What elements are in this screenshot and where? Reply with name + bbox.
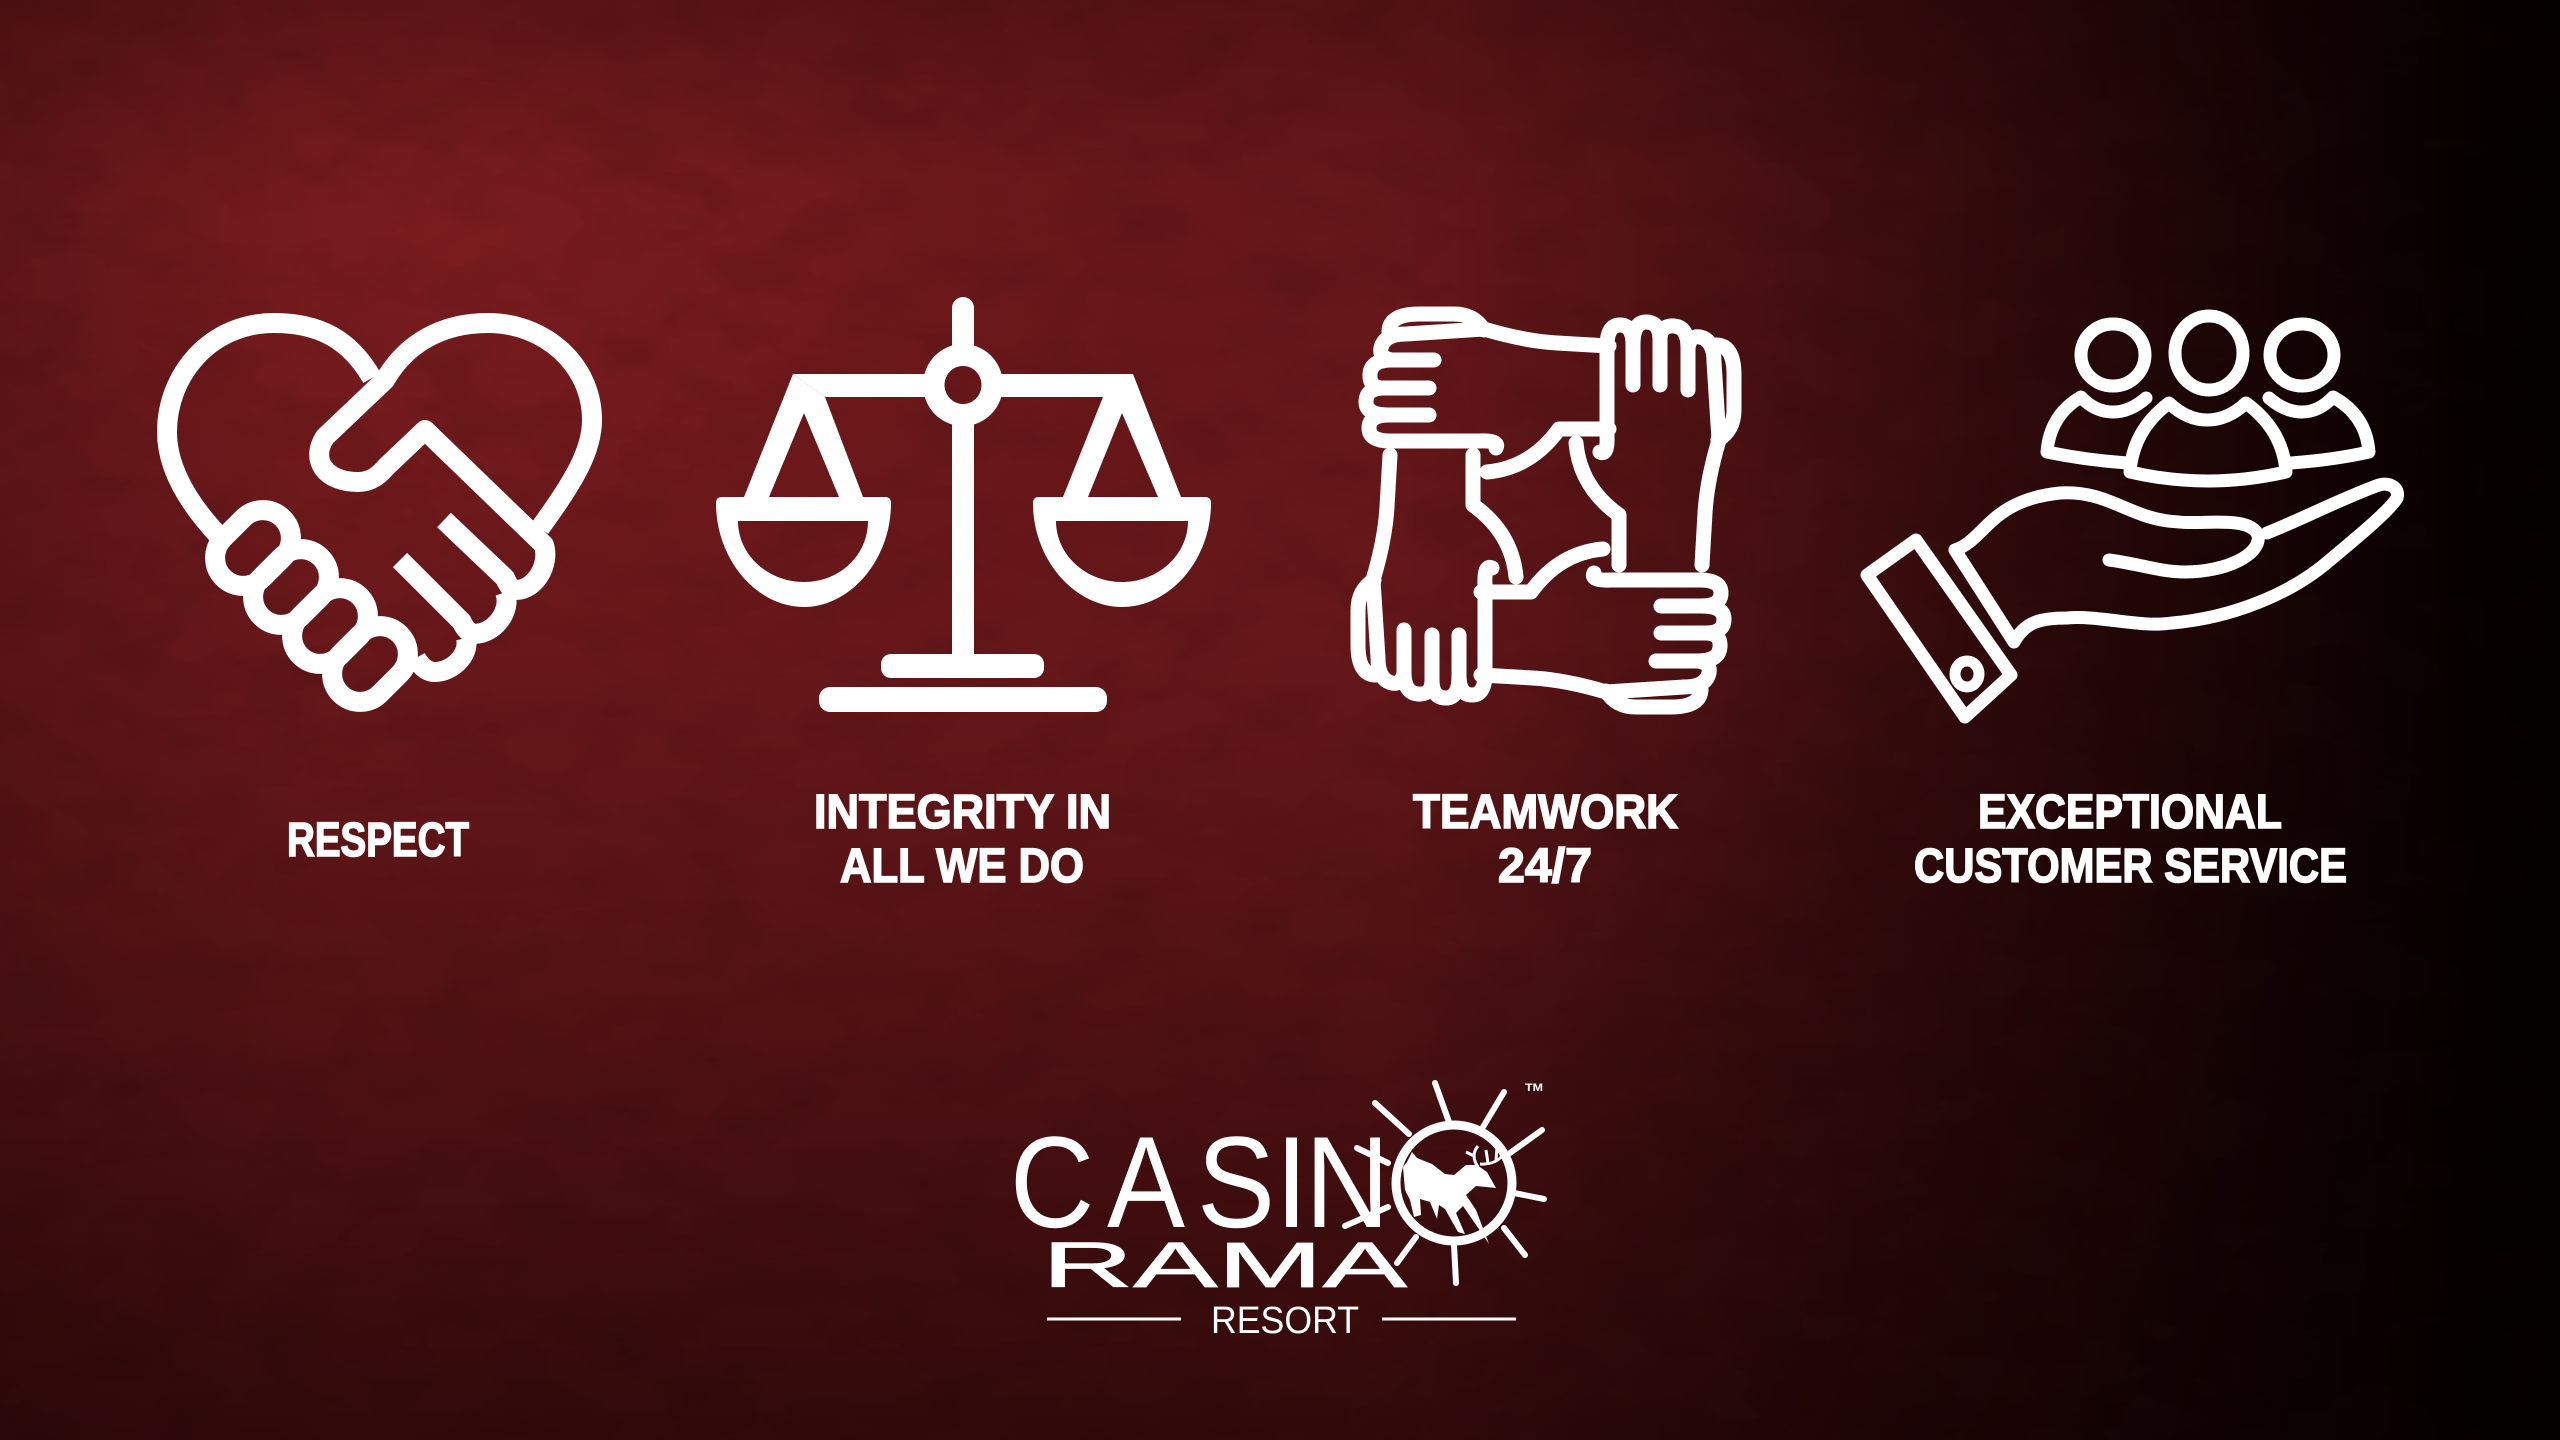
icon: handshake heart bbox=[167, 323, 592, 713]
label: exceptional customer service: CUSTOMER SERVICE bbox=[1914, 840, 2347, 893]
logo wordmark RESORT: RESORT bbox=[1211, 1300, 1359, 1342]
heart left lobe bbox=[167, 323, 372, 535]
label: teamwork 24/7: 24/7 bbox=[1498, 840, 1592, 893]
trademark: TM bbox=[1525, 1082, 1543, 1094]
logo rules bbox=[1047, 1318, 1516, 1320]
right triangle bbox=[1063, 374, 1181, 497]
emblem: leaping deer bbox=[1403, 1146, 1503, 1244]
finger capsule 3 bbox=[281, 577, 379, 675]
label: teamwork 24/7: TEAMWORK bbox=[1413, 786, 1678, 839]
left triangle bbox=[744, 374, 863, 497]
scale beam bbox=[793, 374, 1133, 397]
scale post bbox=[952, 297, 974, 667]
scale pivot bbox=[923, 344, 1003, 426]
label: teamwork 24/7 bbox=[1413, 786, 1678, 893]
label: integrity in all we do: INTEGRITY IN bbox=[814, 786, 1111, 839]
right pan bbox=[1033, 497, 1211, 607]
finger capsule 2 bbox=[242, 538, 340, 636]
label: integrity in all we do: ALL WE DO bbox=[840, 840, 1084, 893]
label: respect: RESPECT bbox=[287, 814, 469, 867]
logo wordmark CASINO: CASINO bbox=[1010, 1110, 1486, 1255]
scale lower base bbox=[819, 687, 1107, 712]
scale upper base bbox=[881, 654, 1044, 678]
logo: Casino Rama Resort bbox=[1010, 1082, 1544, 1342]
label: integrity in all we do bbox=[814, 786, 1111, 893]
icon: four interlocked hands bbox=[1358, 314, 1734, 707]
emblem: sun circle with rays bbox=[1345, 1083, 1544, 1283]
finger capsule 4 bbox=[321, 615, 419, 713]
logo wordmark RAMA: RAMA bbox=[1042, 1229, 1408, 1301]
gripping fingers bbox=[400, 560, 507, 672]
finger capsule 1 bbox=[204, 499, 302, 597]
right person bbox=[2269, 324, 2369, 463]
hand top left bbox=[1366, 314, 1609, 472]
hand bottom left bbox=[1358, 455, 1516, 698]
icon: customers held in a hand bbox=[1867, 316, 2398, 717]
label: exceptional customer service: EXCEPTIONAL bbox=[1978, 786, 2282, 839]
heart right lobe and upper hand bbox=[319, 323, 592, 590]
hand bottom right bbox=[1481, 549, 1724, 707]
shirt cuff bbox=[1867, 540, 2011, 717]
centre person bbox=[2130, 316, 2286, 481]
left person bbox=[2047, 324, 2146, 463]
label: exceptional customer service bbox=[1914, 786, 2347, 893]
cuff button bbox=[1955, 661, 1979, 687]
hand top right bbox=[1576, 322, 1734, 565]
open hand bbox=[1955, 493, 2258, 572]
left pan bbox=[716, 497, 891, 607]
icon: balance scale bbox=[716, 297, 1211, 712]
